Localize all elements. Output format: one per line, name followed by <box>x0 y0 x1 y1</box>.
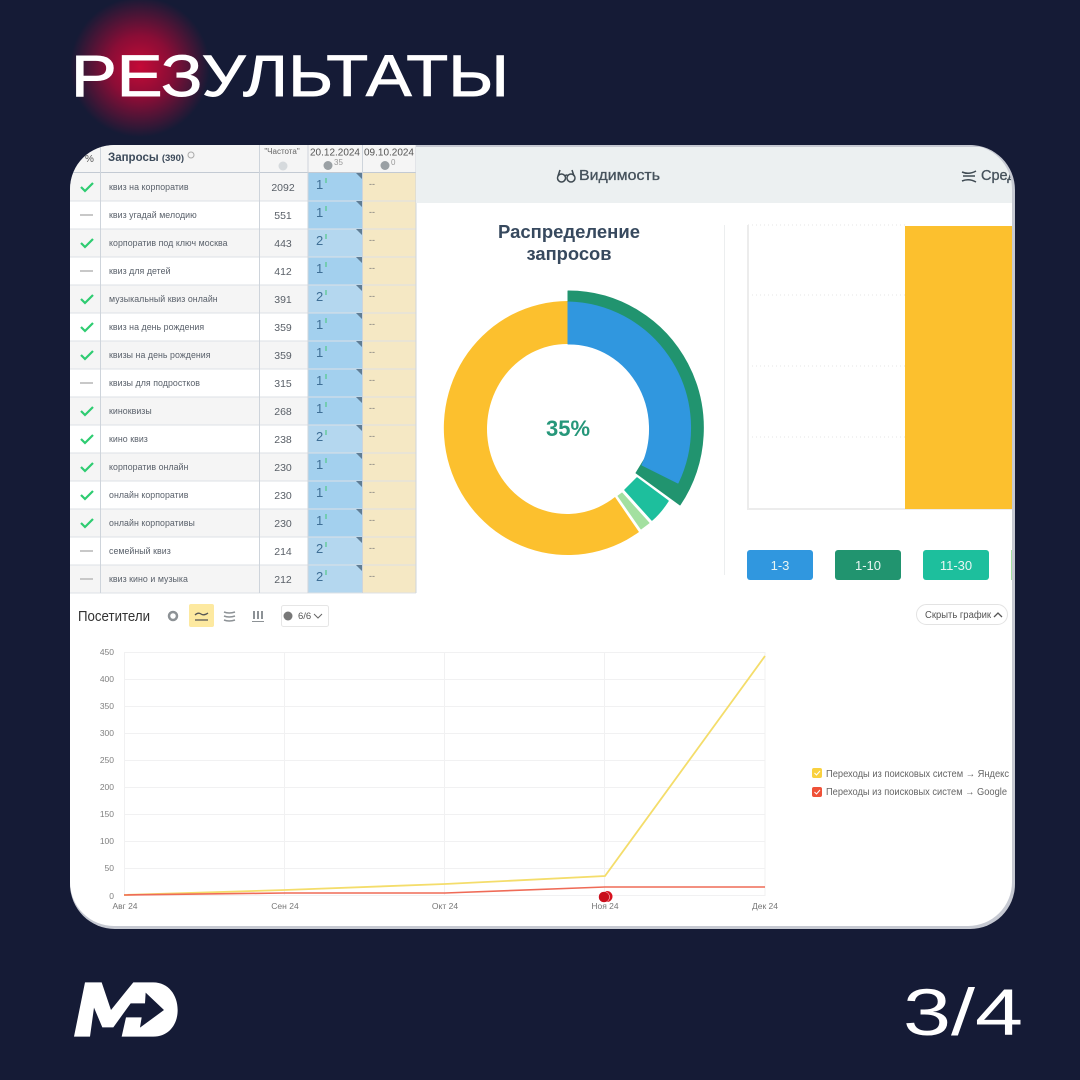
row 15: 2 <box>316 569 323 584</box>
row 3: -- <box>369 235 375 245</box>
row 5: музыкальный квиз онлайн <box>109 294 218 304</box>
visitors toolbar <box>78 604 328 627</box>
row 10: 238 <box>274 434 292 446</box>
row 13: 230 <box>274 518 292 530</box>
page number: 3/4 <box>903 975 1023 1049</box>
row 4: квиз для детей <box>109 266 171 276</box>
legend buttons: 1-3 <box>771 558 789 573</box>
row 15: квиз кино и музыка <box>109 574 188 584</box>
row 1: 1 <box>316 177 323 192</box>
row 4: 412 <box>274 266 292 278</box>
line: Yandex <box>124 656 765 895</box>
y axis labels: 400 <box>100 674 114 684</box>
row 3: корпоратив под ключ москва <box>109 238 228 248</box>
row 6: квиз на день рождения <box>109 322 204 332</box>
row 11: 1 <box>316 457 323 472</box>
row 6: 1 <box>316 317 323 332</box>
row 11: -- <box>369 459 375 469</box>
row 7: квизы на день рождения <box>109 350 211 360</box>
row 11: 230 <box>274 462 292 474</box>
row 2: квиз угадай мелодию <box>109 210 197 220</box>
tab bar <box>416 145 1016 203</box>
x axis labels <box>112 903 778 910</box>
row 7 <box>70 341 416 369</box>
row 9: -- <box>369 403 375 413</box>
row 7: 1 <box>316 345 323 360</box>
line: Google <box>124 887 765 895</box>
chart legend: Переходы из поисковых систем → Яндекс <box>826 769 1009 780</box>
row 12 <box>70 481 416 509</box>
icon: lines <box>962 171 976 182</box>
row 2: 1 <box>316 205 323 220</box>
row 4: 1 <box>316 261 323 276</box>
visitors toolbar: Посетители <box>78 609 150 625</box>
row 14: 2 <box>316 541 323 556</box>
x axis labels: Окт 24 <box>432 901 458 911</box>
row 15: -- <box>369 571 375 581</box>
row 3 <box>70 229 416 257</box>
y axis labels: 0 <box>109 891 114 901</box>
y axis labels: 150 <box>100 809 114 819</box>
row 14: семейный квиз <box>109 546 171 556</box>
card frame <box>70 145 1015 929</box>
table header <box>70 145 416 174</box>
table header: 35 <box>334 158 343 167</box>
row 6 <box>70 313 416 341</box>
table header: Запросы (390) <box>108 152 184 164</box>
row 15 <box>70 565 416 593</box>
row 3: 2 <box>316 233 323 248</box>
row 10: -- <box>369 431 375 441</box>
panel: screenshot card <box>70 145 1016 926</box>
title: РЕЗУЛЬТАТЫ <box>71 44 509 109</box>
row 6: 359 <box>274 322 292 334</box>
row 8: квизы для подростков <box>109 378 200 388</box>
tab bar: Видимость <box>579 168 660 184</box>
row 5 <box>70 285 416 313</box>
table header: 09.10.2024 <box>364 148 414 158</box>
row 9: 1 <box>316 401 323 416</box>
chart legend <box>812 768 1009 798</box>
row 14: 214 <box>274 546 292 558</box>
row 5: -- <box>369 291 375 301</box>
heading: distribution: запросов <box>526 244 612 264</box>
x axis labels: Авг 24 <box>112 901 138 911</box>
table header: 20.12.2024 <box>310 148 360 158</box>
y axis labels: 100 <box>100 836 114 846</box>
row 4: -- <box>369 263 375 273</box>
table header: "Частота" <box>264 147 300 156</box>
row 1: квиз на корпоратив <box>109 182 189 192</box>
row 1: -- <box>369 179 375 189</box>
row 13: 1 <box>316 513 323 528</box>
row 5: 2 <box>316 289 323 304</box>
chart legend: Переходы из поисковых систем → Google <box>826 787 1008 798</box>
legend buttons <box>747 550 1013 580</box>
row 5: 391 <box>274 294 292 306</box>
row 6: -- <box>369 319 375 329</box>
row 10: 2 <box>316 429 323 444</box>
row 10 <box>70 425 416 453</box>
table header: 0 <box>391 158 396 167</box>
panel: queries table <box>70 145 416 593</box>
row 12: 1 <box>316 485 323 500</box>
row 4 <box>70 257 416 285</box>
row 13: -- <box>369 515 375 525</box>
y axis labels: 50 <box>105 863 114 873</box>
y axis labels <box>100 647 114 901</box>
row 9 <box>70 397 416 425</box>
x axis labels: Дек 24 <box>752 901 778 911</box>
line chart <box>100 647 778 911</box>
y axis labels: 450 <box>100 647 114 657</box>
heading: distribution: Распределение <box>498 222 640 242</box>
row 12: онлайн корпоратив <box>109 490 189 500</box>
row 1: 2092 <box>271 182 295 194</box>
row 1 <box>70 173 416 201</box>
row 3: 443 <box>274 238 292 250</box>
row 8: 315 <box>274 378 292 390</box>
row 2: -- <box>369 207 375 217</box>
row 7: -- <box>369 347 375 357</box>
row 11: корпоратив онлайн <box>109 462 189 472</box>
row 13: онлайн корпоративы <box>109 518 195 528</box>
row 2 <box>70 201 416 229</box>
row 8: 1 <box>316 373 323 388</box>
row 12: 230 <box>274 490 292 502</box>
event marker <box>598 891 612 902</box>
row 8 <box>70 369 416 397</box>
table header: % <box>85 154 94 165</box>
row 14: -- <box>369 543 375 553</box>
logo <box>74 982 178 1037</box>
row 2: 551 <box>274 210 292 222</box>
row 15: 212 <box>274 574 292 586</box>
row 13 <box>70 509 416 537</box>
visitors toolbar: 6/6 <box>298 611 311 622</box>
legend buttons: 1-10 <box>855 558 881 573</box>
y axis labels: 250 <box>100 755 114 765</box>
tab bar: Сред <box>981 168 1016 184</box>
legend buttons: 11-30 <box>940 558 972 573</box>
row 9: киноквизы <box>109 406 152 416</box>
row 12: -- <box>369 487 375 497</box>
y axis labels: 300 <box>100 728 114 738</box>
row 10: кино квиз <box>109 434 148 444</box>
row 9: 268 <box>274 406 292 418</box>
bar chart <box>748 225 1012 509</box>
red glow <box>70 0 210 137</box>
heading: distribution <box>498 222 640 264</box>
x axis labels: Сен 24 <box>271 901 299 911</box>
icon: glasses <box>558 170 575 182</box>
hide chart button: Скрыть график <box>925 609 992 621</box>
row 8: -- <box>369 375 375 385</box>
y axis labels: 350 <box>100 701 114 711</box>
y axis labels: 200 <box>100 782 114 792</box>
row 7: 359 <box>274 350 292 362</box>
x axis labels: Ноя 24 <box>591 901 619 911</box>
hide chart button <box>916 604 1008 624</box>
row 11 <box>70 453 416 481</box>
donut chart <box>444 291 703 555</box>
row 14 <box>70 537 416 565</box>
donut chart: 35% <box>546 416 590 441</box>
